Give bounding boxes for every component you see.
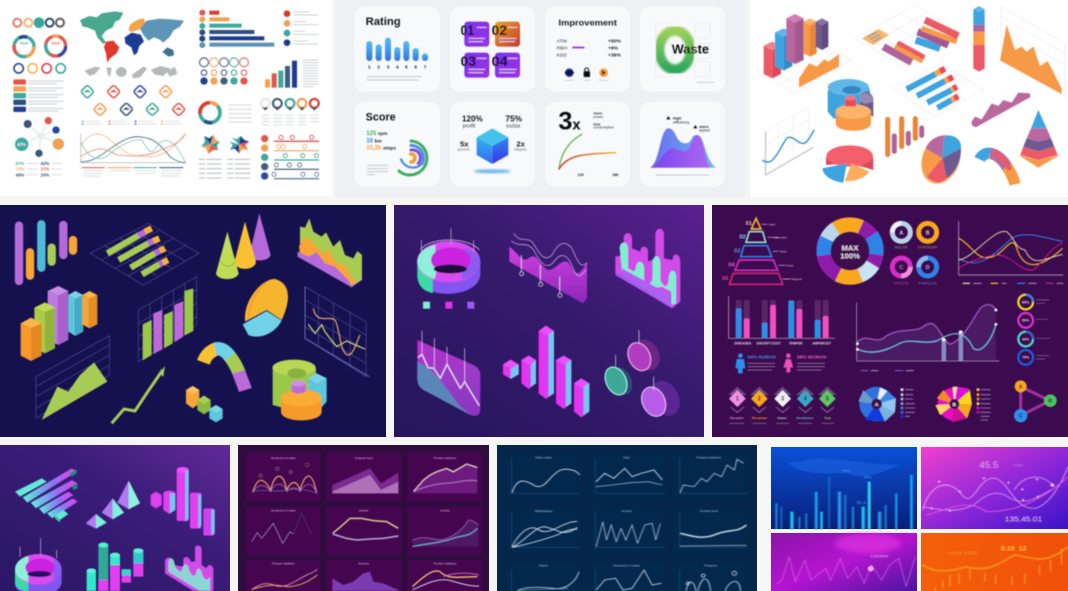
rising line xyxy=(680,459,744,493)
card: 3x: power xyxy=(593,115,604,119)
large orange area xyxy=(1000,25,1062,94)
multi line chart xyxy=(81,133,186,163)
glowing map xyxy=(787,458,901,477)
panel: dark purple dashboard: Label xyxy=(769,222,776,226)
card: Improvement: +50% xyxy=(608,38,621,44)
spike line xyxy=(776,557,915,587)
percent rings xyxy=(1018,295,1050,365)
triangle network: B xyxy=(1048,399,1052,405)
candles xyxy=(935,548,1061,591)
tile titles: Product statistics xyxy=(696,455,722,459)
grid floor bars xyxy=(90,223,199,285)
card: cube stats: 120% xyxy=(462,114,483,124)
card: cube stats xyxy=(457,114,527,173)
values: 80% xyxy=(864,475,871,479)
diamond steps: 4 xyxy=(804,397,808,403)
diamond steps: Phosphin xyxy=(730,416,744,420)
jagged double line xyxy=(596,468,662,487)
coin discs xyxy=(601,330,685,421)
cones xyxy=(216,213,271,279)
3D column chart xyxy=(764,14,828,78)
single line tile xyxy=(252,523,293,543)
layered area xyxy=(298,218,362,287)
panel: dark purple dashboard: Label label xyxy=(774,235,787,239)
donut captions: D xyxy=(926,265,930,271)
glow node xyxy=(868,566,874,571)
diamond steps: Phosphate xyxy=(752,416,767,420)
grids xyxy=(757,5,1065,175)
line wall xyxy=(305,287,369,377)
neon columns xyxy=(503,326,589,417)
wave area xyxy=(509,233,587,303)
legend strip xyxy=(82,121,182,124)
stacked area xyxy=(332,468,398,493)
card: 01 02 03 04: 04 xyxy=(492,54,508,69)
card: efficiency area chart: speed xyxy=(699,127,710,132)
horizontal bars xyxy=(199,10,274,48)
ribbon chart xyxy=(165,545,213,591)
panel: dark purple dashboard xyxy=(712,205,1068,437)
donut captions: C xyxy=(899,265,903,271)
torus legend xyxy=(423,302,474,309)
neon columns xyxy=(151,467,215,536)
column highlights xyxy=(511,331,589,415)
card: Improvement xyxy=(557,18,621,80)
card: Improvement: ATM xyxy=(557,38,567,44)
stepped bars xyxy=(15,468,78,523)
big donut: 100% xyxy=(840,252,860,261)
finance area xyxy=(332,572,398,591)
card: 3x: 120 xyxy=(578,173,584,177)
glass area chart xyxy=(417,331,480,416)
panel: neon isometric cropped xyxy=(0,445,230,591)
network diagram xyxy=(15,117,64,157)
curve tile xyxy=(512,469,580,493)
card: cube stats: 2x xyxy=(516,140,526,149)
navy tiles xyxy=(506,453,749,591)
note card xyxy=(862,29,889,45)
percent list: 67% xyxy=(16,161,24,166)
axes xyxy=(511,458,747,591)
tile titles: Progress xyxy=(704,564,718,568)
tilted pie xyxy=(914,129,968,190)
trend line xyxy=(923,547,1068,571)
card: cube stats: epoches xyxy=(457,148,470,152)
curves xyxy=(923,467,1068,515)
tile titles: Dynamics of sales xyxy=(271,456,296,460)
donut captions: PHARULUS xyxy=(919,281,938,285)
card: 3x xyxy=(558,107,618,177)
spike line xyxy=(596,522,660,547)
card: efficiency area chart: high xyxy=(673,115,682,120)
pyramid labels: 05 xyxy=(722,276,728,282)
horizontal isometric bars xyxy=(907,69,958,108)
tile titles: Dynamics of sales xyxy=(613,564,640,568)
world map xyxy=(80,11,184,63)
diamond steps: 5 xyxy=(826,397,830,403)
percent rings: 40% xyxy=(1022,337,1030,341)
card: Rating: Rating xyxy=(366,16,401,28)
diamond markers xyxy=(81,85,185,116)
radial charts xyxy=(858,387,991,422)
pyramid labels: 03 xyxy=(734,248,740,254)
ring chart xyxy=(200,103,252,123)
card: Rating: 6 xyxy=(414,64,417,69)
bullet list xyxy=(284,10,318,46)
diamond steps: 2 xyxy=(758,397,762,403)
chart legend xyxy=(963,281,1063,285)
legend rows xyxy=(13,79,63,112)
twin bar chart: AMPERCET xyxy=(812,341,831,345)
diamond steps xyxy=(728,387,837,423)
neon ribbon chart xyxy=(615,229,680,308)
values: 0.10 12 xyxy=(1001,546,1027,552)
human stats: 58% WOMAN xyxy=(797,355,827,360)
card: efficiency area chart: more xyxy=(699,124,710,129)
triangle network xyxy=(1014,380,1057,422)
overlapping curves xyxy=(512,522,577,547)
panel: dark purple dashboard: Purple xyxy=(786,263,794,267)
figures: 0.001 xyxy=(1013,464,1023,468)
donut captions: BULLER xyxy=(895,246,908,250)
tile titles: Product statistics xyxy=(434,561,457,565)
panel: flat infographic elements: 2019 xyxy=(52,41,60,45)
diamond steps: Data xyxy=(824,416,831,420)
grey mini maps xyxy=(85,66,177,78)
small area chart xyxy=(799,54,839,87)
card: 3x: 3x xyxy=(558,107,581,135)
neon torus xyxy=(15,538,62,591)
cylinder columns xyxy=(87,542,143,591)
tile titles: Sale xyxy=(623,455,630,459)
card: Rating: 3 xyxy=(387,64,390,69)
panel: flat infographic elements: 2019 xyxy=(20,41,28,45)
flower legends xyxy=(199,159,250,178)
card: Score: 125 rpm xyxy=(366,131,388,137)
values: Value xyxy=(842,469,851,473)
percent list: 48% xyxy=(16,172,24,177)
big donut: MAX xyxy=(841,243,859,252)
cubes xyxy=(186,386,223,422)
timelines xyxy=(261,135,319,180)
chart captions xyxy=(82,168,183,176)
donut captions: B xyxy=(926,230,930,236)
card: cube stats: 75% xyxy=(505,114,522,124)
card: Score: Score xyxy=(366,111,396,123)
small rings xyxy=(14,64,65,73)
card: Score xyxy=(366,111,427,175)
card: cube stats: profit xyxy=(463,123,476,129)
cylinder bars xyxy=(19,224,73,281)
isometric bars on grid xyxy=(883,20,958,62)
card: Rating: 2 xyxy=(377,64,380,69)
band chart xyxy=(333,518,398,540)
card: Score: 15,2k steps xyxy=(366,146,396,152)
thin bars xyxy=(888,119,922,155)
human stats xyxy=(735,353,827,373)
pie xyxy=(243,279,288,337)
percent list: 20% xyxy=(41,172,49,177)
bar-line chart xyxy=(413,464,477,493)
percent list: 37% xyxy=(41,167,49,172)
percent list xyxy=(16,161,62,177)
card: Improvement: Improvement xyxy=(558,18,617,28)
flower charts xyxy=(201,135,249,154)
card: 3x: 280 xyxy=(612,173,618,177)
card: 3x: consumption xyxy=(593,126,614,130)
card: 01 02 03 04: 03 xyxy=(461,54,476,69)
radial charts: B xyxy=(953,402,957,408)
diamond steps: Distribution xyxy=(797,416,814,420)
card: efficiency area chart xyxy=(650,115,716,175)
3D columns xyxy=(21,286,97,361)
values: 35.4 xyxy=(856,500,866,506)
arch chart xyxy=(253,463,317,493)
card: 01 02 03 04: 02 xyxy=(492,23,507,38)
wall column chart xyxy=(138,277,197,362)
card: Waste: Waste xyxy=(672,42,709,56)
diamond steps: Genes xyxy=(777,416,787,420)
big donut xyxy=(824,225,876,277)
tile titles: Status xyxy=(539,564,549,568)
tile titles: Product statistics xyxy=(434,456,457,460)
pink mountain strip xyxy=(972,93,1030,127)
stacked donut xyxy=(272,360,327,420)
percent rings: 65% xyxy=(1022,300,1030,304)
donut captions: PROSTIN xyxy=(894,281,909,285)
rising arrow xyxy=(112,370,163,423)
value: 0.10.004% xyxy=(871,554,888,558)
tile titles xyxy=(535,455,722,568)
pyramid labels: 01 xyxy=(746,221,752,227)
percent list: 42% xyxy=(41,161,49,166)
light bars xyxy=(775,475,913,529)
figures: 45.5 xyxy=(979,460,998,471)
tile titles: Product statistics xyxy=(272,561,295,565)
tile titles: Marketplace xyxy=(535,509,553,513)
green area wall xyxy=(36,336,109,420)
card: Rating: 7 xyxy=(424,64,427,69)
radial charts: A xyxy=(875,402,879,408)
card backgrounds xyxy=(354,7,725,187)
values xyxy=(842,469,871,506)
panel: dark purple dashboard: Magenta xyxy=(792,277,803,281)
panel: isometric charts on white xyxy=(750,0,1068,197)
panel: blue bar skyline image xyxy=(771,447,917,529)
pyramids xyxy=(86,481,140,529)
glow xyxy=(835,533,901,553)
donut captions xyxy=(894,230,938,285)
twin bar chart xyxy=(729,296,835,345)
stacked pin columns xyxy=(200,58,248,85)
top-right line chart xyxy=(959,221,1063,275)
wave tile xyxy=(413,520,478,547)
diamond steps: 3 xyxy=(781,397,785,403)
pyramid labels xyxy=(722,221,752,282)
donut captions: A xyxy=(899,230,903,236)
twin bar chart: TEMPER xyxy=(789,341,803,345)
tile titles: Analysis level xyxy=(355,456,373,460)
tile titles xyxy=(271,456,457,565)
tile titles: Activity xyxy=(359,508,369,512)
tile titles: Activity xyxy=(440,508,450,512)
card: 3x: more xyxy=(593,112,602,116)
figures xyxy=(979,460,1043,523)
panel: dark purple dashboard: Bullet xyxy=(780,249,787,253)
arc chart xyxy=(203,349,245,390)
panel: neon isometric charts xyxy=(394,205,704,437)
figures: 135,45.01 xyxy=(1005,515,1043,523)
panel: purple dashboard grid xyxy=(238,445,489,591)
card: Rating xyxy=(366,16,428,80)
triangle network: A xyxy=(1019,384,1023,390)
tile titles: Sales value xyxy=(535,455,552,459)
bottom tiles xyxy=(517,570,741,591)
card: cube stats: 5x xyxy=(460,140,469,149)
tile titles: Dynamics of sales xyxy=(271,508,296,512)
tile titles: Activity xyxy=(621,509,632,513)
stacked column xyxy=(973,6,985,72)
neon torus xyxy=(417,228,480,294)
column caps xyxy=(503,326,589,388)
percent rings: 75% xyxy=(1022,356,1030,360)
tile titles: Finance xyxy=(358,561,369,565)
card: Improvement: KDZ xyxy=(557,52,567,58)
panel: orange candlestick image: 0.0.20 -4.01% xyxy=(948,551,978,556)
percent list: 72% xyxy=(16,167,24,172)
pin row xyxy=(261,99,319,125)
triangle network: C xyxy=(1019,414,1023,420)
curved arc xyxy=(980,153,1015,184)
layered pyramid xyxy=(729,218,783,284)
card: Rating: 4 xyxy=(396,64,399,69)
twin bar chart: DISCEPT.COST xyxy=(757,341,781,345)
small donuts A B C D xyxy=(892,223,937,276)
line chart xyxy=(762,130,814,175)
card: Rating: 1 xyxy=(368,64,371,69)
location pins xyxy=(13,18,64,27)
panel: magenta line image xyxy=(771,533,917,591)
card: Rating: 5 xyxy=(405,64,408,69)
card: Waste xyxy=(656,23,714,82)
pyramid labels: 04 xyxy=(728,262,735,268)
panel: flat infographic elements xyxy=(0,0,332,196)
donut pair xyxy=(14,36,66,57)
card: efficiency area chart: efficiency xyxy=(673,119,690,124)
panel: navy dashboard grid xyxy=(497,445,757,591)
human stats: 94% HUMAN xyxy=(748,355,776,360)
main area line chart xyxy=(856,302,999,371)
network diagram: 67% xyxy=(17,142,26,147)
layered pyramid xyxy=(1018,110,1060,168)
lower tile lines xyxy=(252,569,479,590)
panel: white UI score cards xyxy=(335,0,745,197)
band line xyxy=(680,525,746,546)
card: 01 02 03 04: 01 xyxy=(461,23,474,38)
percent rings: 50% xyxy=(1022,319,1030,323)
card: cube stats: ou/pa xyxy=(506,123,521,129)
diamond steps: 1 xyxy=(736,397,740,403)
card: Improvement: +9% xyxy=(608,45,619,51)
card: Improvement: +38% xyxy=(608,52,621,58)
card: 3x: less xyxy=(593,122,600,126)
card: 01 02 03 04 xyxy=(461,22,520,78)
nodes xyxy=(931,477,1054,512)
panel: orange candlestick image xyxy=(921,533,1068,591)
exploded pie xyxy=(822,145,873,183)
panel: pink purple network image xyxy=(921,447,1068,529)
card: cube stats: integrals xyxy=(514,148,527,152)
card: Improvement: RBH xyxy=(557,45,568,51)
panel: isometric charts on navy xyxy=(0,205,386,437)
pyramid labels: 02 xyxy=(739,234,746,240)
tile titles: Growth level xyxy=(700,509,718,513)
dashboard tiles xyxy=(246,453,482,591)
twin bar chart: DISEASES xyxy=(734,341,752,345)
card: Score: 10 km xyxy=(366,138,382,144)
column chart xyxy=(265,60,318,88)
donut captions: DONGSUAR xyxy=(918,246,938,250)
stacked donut xyxy=(828,79,873,131)
